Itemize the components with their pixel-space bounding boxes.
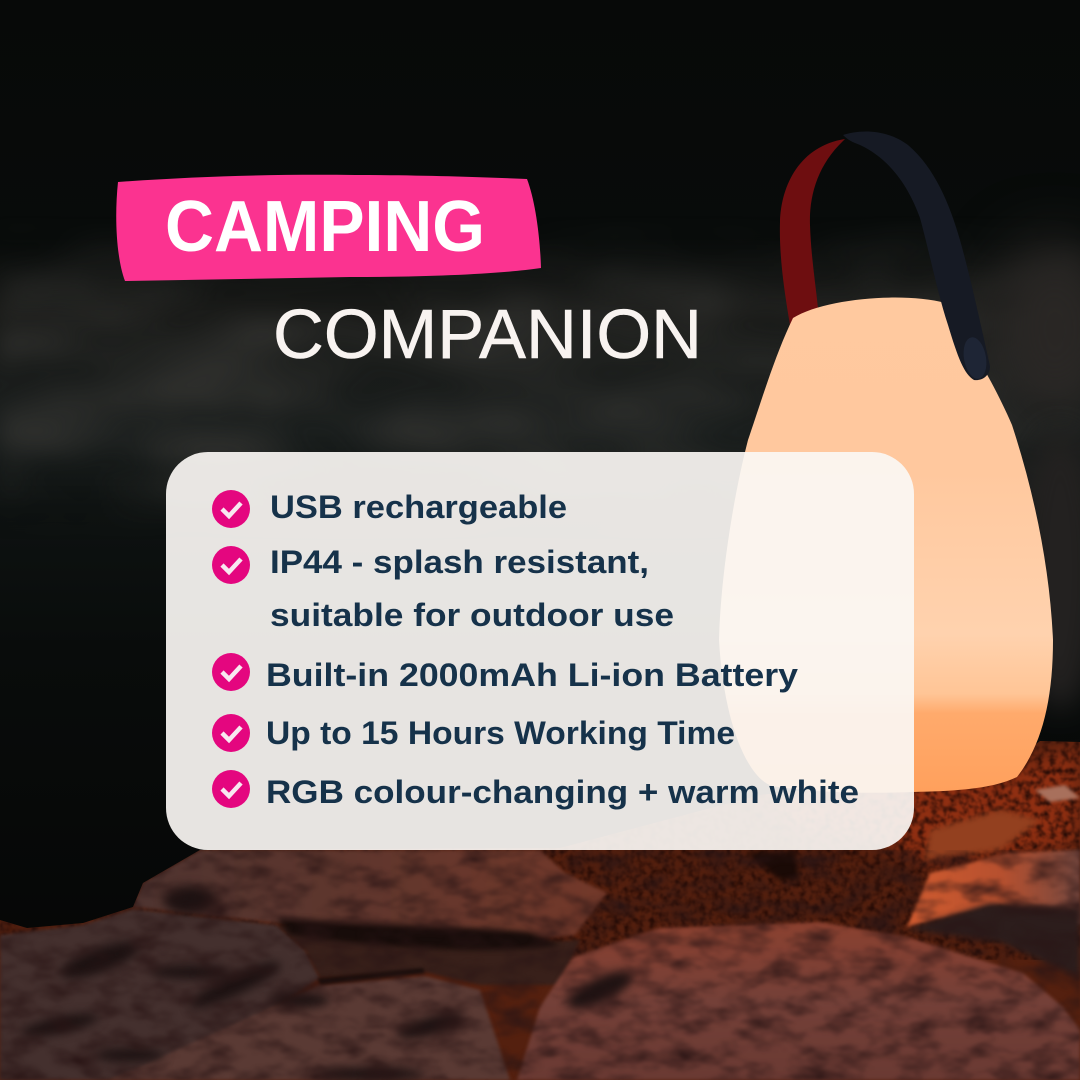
dark strap of handle: [843, 131, 990, 380]
right large rock: [517, 922, 1080, 1080]
bright soil near lamp: [880, 742, 1080, 873]
shaded face of orange rock: [907, 903, 1080, 978]
title: COMPANION: COMPANION: [273, 295, 702, 373]
feature: RGB colour-changing: RGB colour-changing + warm white: [266, 774, 859, 810]
rocky ground in lamp light: [0, 740, 1080, 1080]
feature list panel: [166, 452, 914, 850]
lantern body: [719, 298, 1053, 793]
soil speckle: [0, 740, 1080, 960]
feature: IP44 splash resistant: [212, 544, 674, 633]
background: blurred night landscape: [0, 226, 1080, 712]
back-left flat rock: [133, 850, 607, 940]
pale stones near lamp: [925, 810, 1040, 860]
rock texture: [0, 850, 1080, 1080]
orange lit rock: [907, 850, 1080, 927]
feature: IP44 splash resistant: suitable for outdoor use: [270, 597, 674, 633]
feature: USB rechargeable: USB rechargeable: [270, 489, 567, 525]
feature: working time: Up to 15 Hours Working Time: [266, 715, 735, 751]
lantern product: [719, 131, 1053, 793]
feature: IP44 splash resistant: IP44 - splash resistant,: [270, 544, 649, 580]
left dark rock: [0, 909, 320, 1080]
dark blotches on rocks: [19, 886, 638, 1080]
title banner: CAMPING: CAMPING: [165, 187, 485, 267]
centre rock: [110, 976, 510, 1080]
strap rivet: [961, 335, 989, 381]
dark crevice: [277, 918, 560, 950]
second crack: [317, 968, 425, 985]
feature: battery: Built-in 2000mAh Li-ion Battery: [266, 657, 798, 693]
shadow under panel: [745, 852, 800, 880]
inner red side of handle: [780, 139, 845, 325]
title banner: CAMPING: [116, 175, 541, 281]
strip of dark earth between rocks: [277, 925, 580, 985]
